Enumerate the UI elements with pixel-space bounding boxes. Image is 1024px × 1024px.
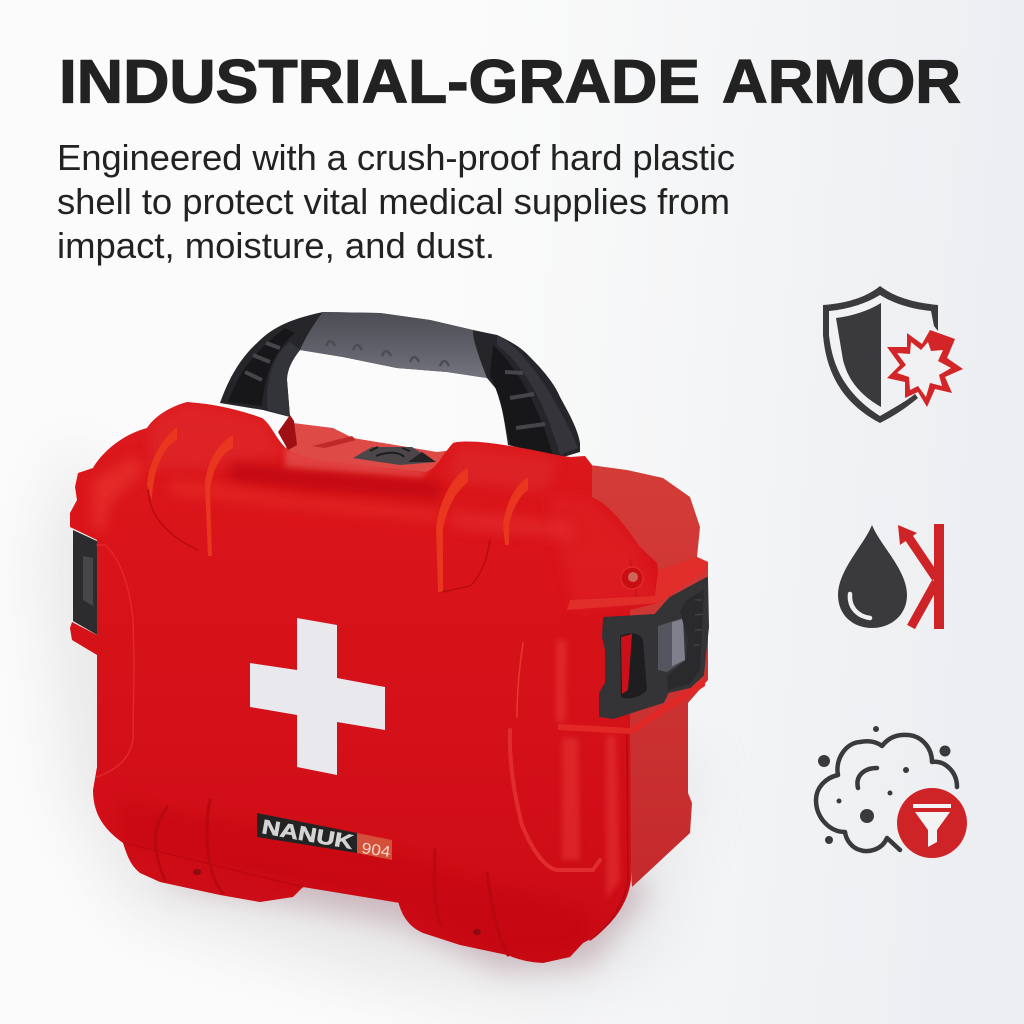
case shadow — [40, 440, 700, 1000]
Nanuk 904 label: 904 — [360, 840, 392, 861]
icon: dust cloud with filter — [816, 726, 967, 858]
case foot details — [193, 869, 481, 935]
drop highlight — [850, 594, 870, 618]
icon: shield with impact burst — [823, 286, 963, 423]
handle grey grip — [300, 312, 487, 378]
handle left ribs — [228, 328, 553, 456]
white medical cross — [250, 618, 385, 775]
case right side face — [590, 465, 708, 887]
title: INDUSTRIAL-GRADE — [59, 48, 700, 116]
icon: water drop with deflection — [838, 524, 944, 629]
body text: Engineered with a crush-proof hard plastic — [57, 137, 735, 178]
case back top surface — [280, 423, 470, 490]
case handle — [220, 312, 580, 458]
left latch — [73, 530, 99, 636]
case recess outlines — [97, 490, 636, 955]
case moulded ribs — [147, 427, 528, 592]
case front shell — [70, 402, 708, 963]
handle grip bumps — [326, 341, 449, 366]
shield dark half — [836, 303, 881, 407]
right latch — [600, 578, 708, 718]
impact burst — [887, 330, 963, 407]
case shading — [92, 402, 655, 955]
deflection arrow — [898, 524, 944, 629]
filter badge — [897, 788, 967, 858]
pressure valve — [353, 447, 436, 465]
hinge pillar — [278, 415, 297, 450]
body text — [57, 137, 735, 266]
funnel — [913, 804, 951, 847]
case pin — [621, 567, 643, 589]
body text: impact, moisture, and dust. — [57, 225, 495, 266]
title: ARMOR — [722, 48, 961, 116]
product photo: red medical case — [70, 312, 708, 963]
Nanuk 904 label — [257, 813, 392, 861]
title — [59, 48, 961, 116]
case lid flange right — [558, 557, 708, 734]
Nanuk 904 label: NANUK — [260, 816, 355, 854]
back top groove — [312, 436, 356, 448]
body text: shell to protect vital medical supplies from — [57, 181, 730, 222]
